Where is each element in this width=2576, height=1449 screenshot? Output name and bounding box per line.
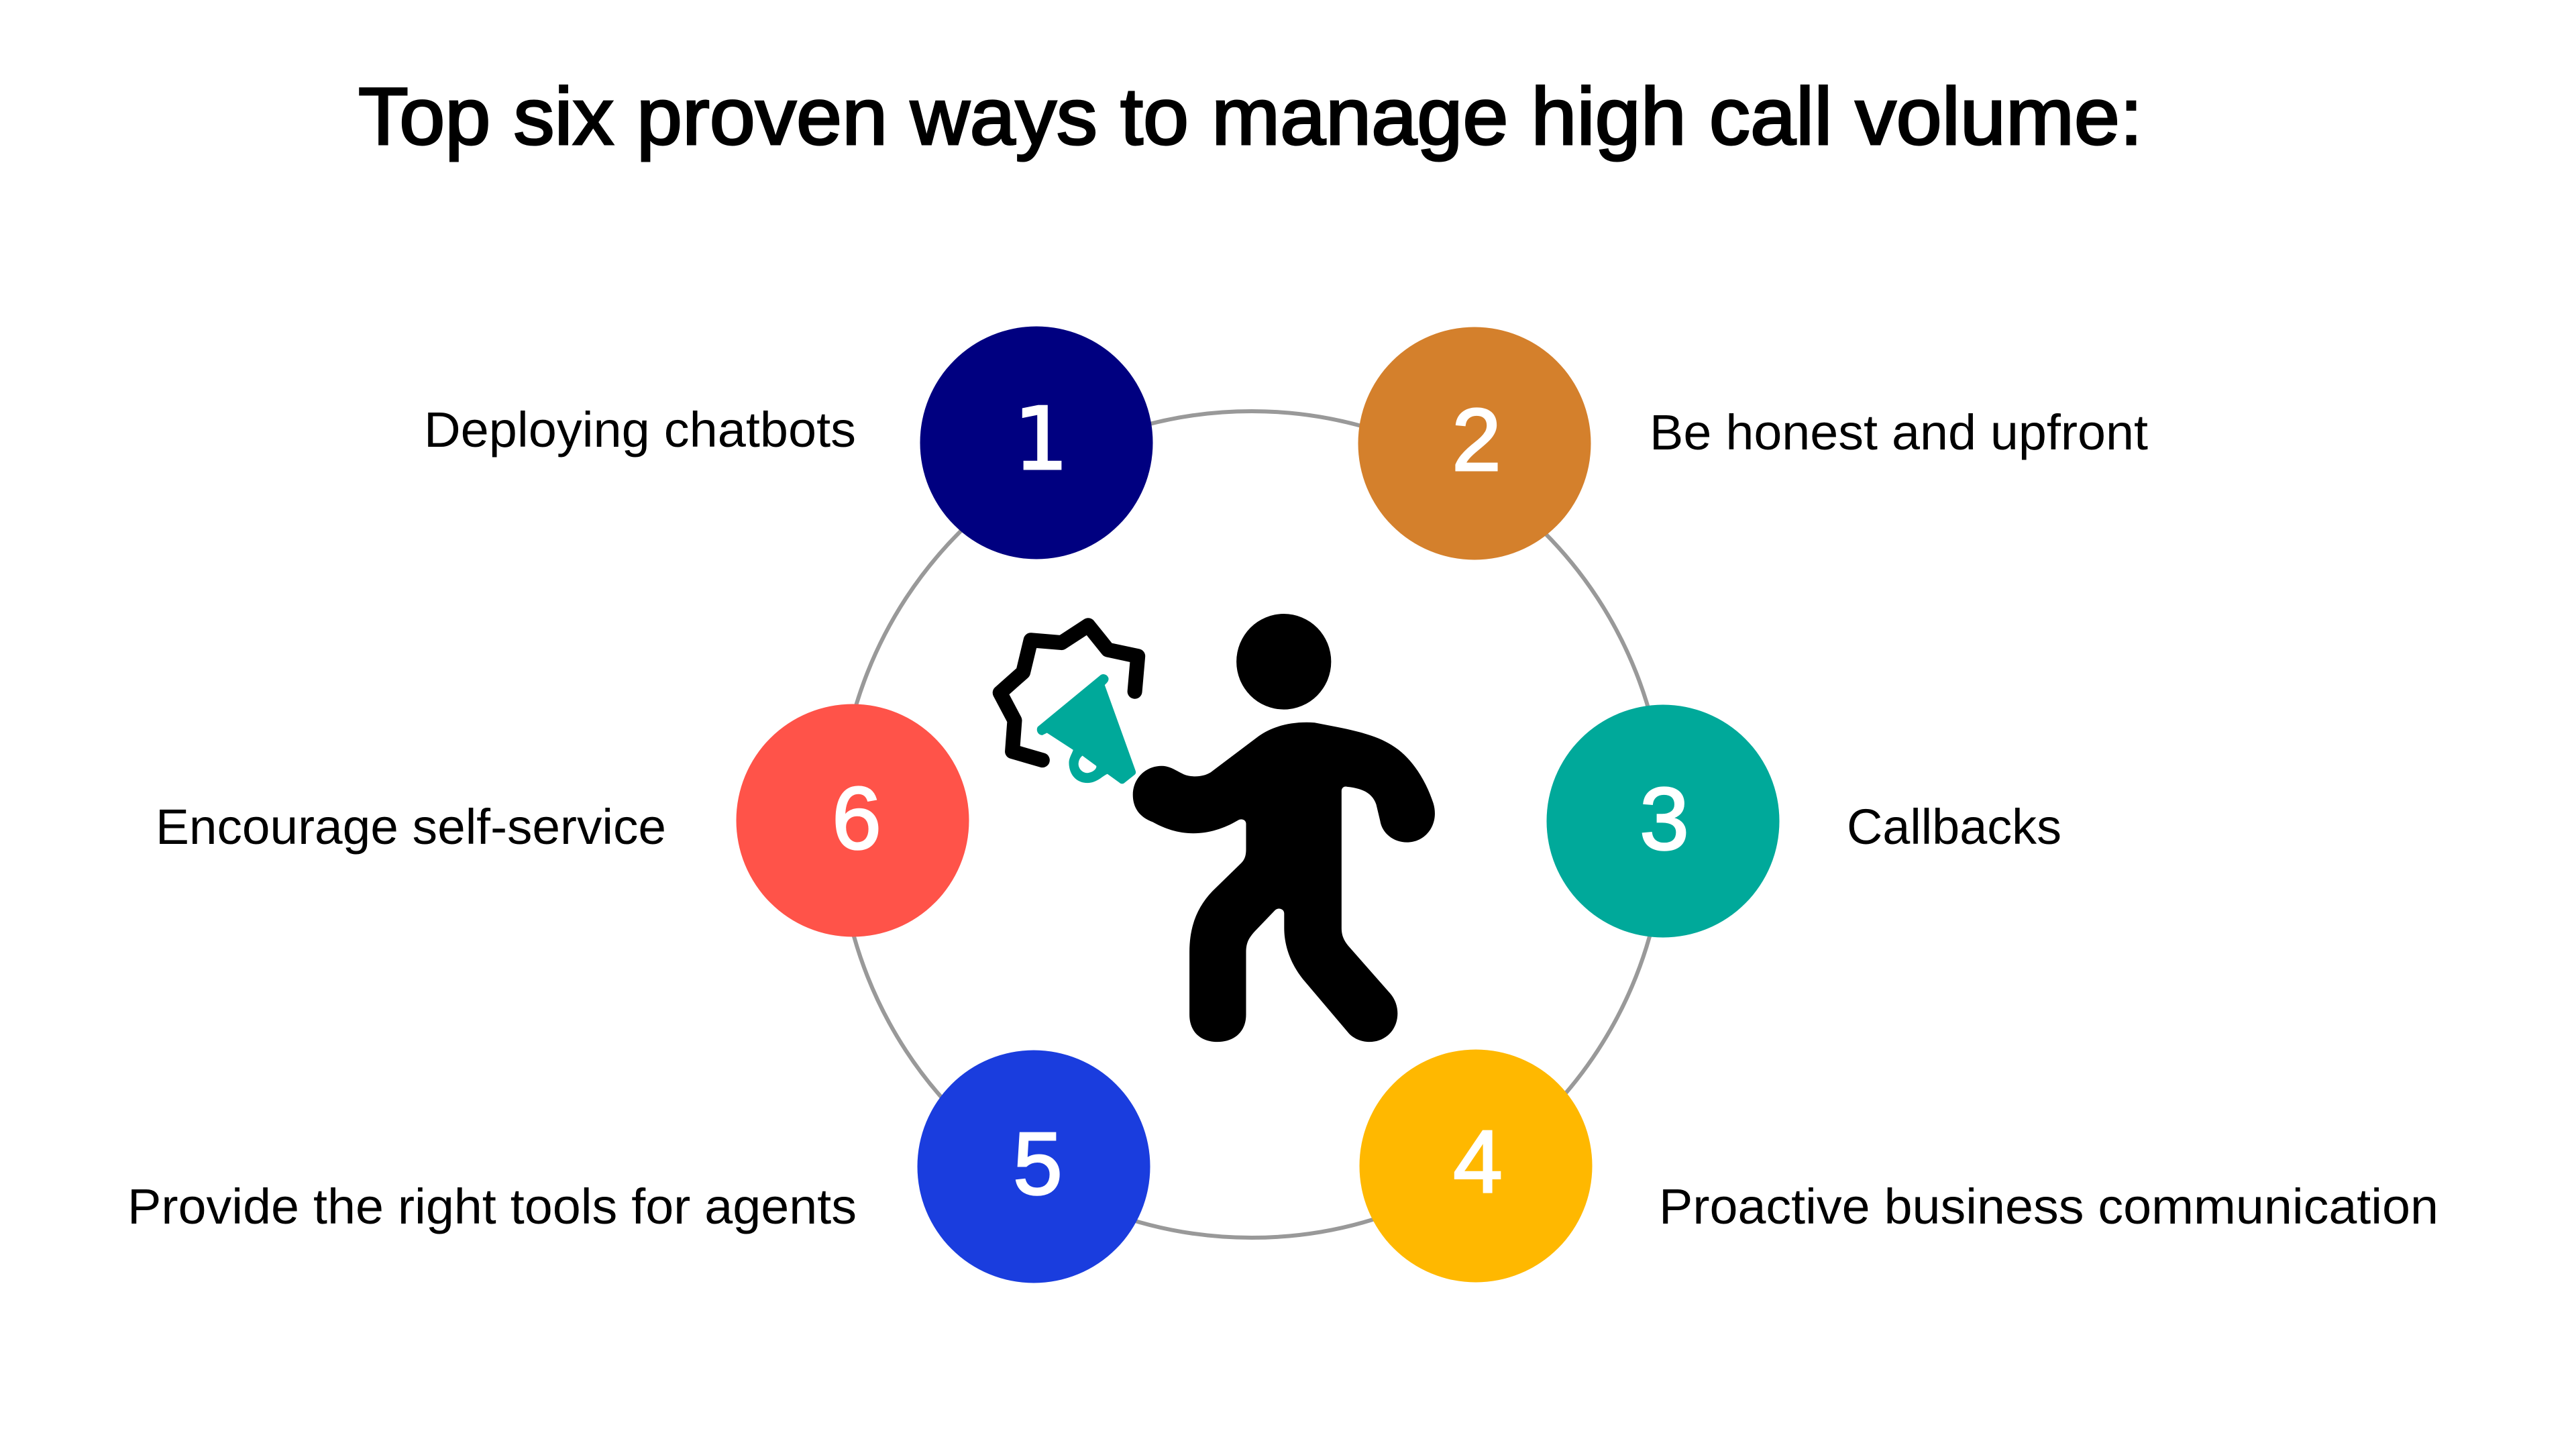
sound burst outline <box>1000 625 1138 760</box>
step 1: navy circle <box>920 326 1152 559</box>
step 5: blue circle: 5 <box>1013 1114 1063 1213</box>
step 6: coral circle: 6 <box>832 769 881 867</box>
step 4: yellow circle <box>1359 1049 1593 1283</box>
megaphone <box>1037 674 1136 784</box>
label 1: Deploying chatbots <box>424 402 856 458</box>
step 5: blue circle <box>918 1051 1150 1283</box>
label 6: Encourage self-service <box>156 799 666 855</box>
person head <box>1236 614 1331 710</box>
title: Top six proven ways to manage high call volume: <box>358 70 2143 162</box>
step 1: navy circle: 1 <box>1014 390 1069 490</box>
label 4: Proactive business communication <box>1659 1179 2438 1234</box>
label 2: Be honest and upfront <box>1650 405 2148 460</box>
person body <box>1133 722 1435 1042</box>
step 2: orange circle: 2 <box>1452 390 1501 489</box>
step 3: teal circle <box>1547 704 1779 938</box>
step 3: teal circle: 3 <box>1640 769 1689 868</box>
label 3: Callbacks <box>1847 799 2061 855</box>
step 2: orange circle <box>1358 327 1591 559</box>
step 6: coral circle <box>737 704 969 936</box>
ring connecting the six circles <box>839 411 1665 1238</box>
label 5: Provide the right tools for agents <box>127 1179 857 1234</box>
central icon: person holding megaphone <box>1000 614 1435 1042</box>
step 4: yellow circle: 4 <box>1453 1112 1503 1211</box>
